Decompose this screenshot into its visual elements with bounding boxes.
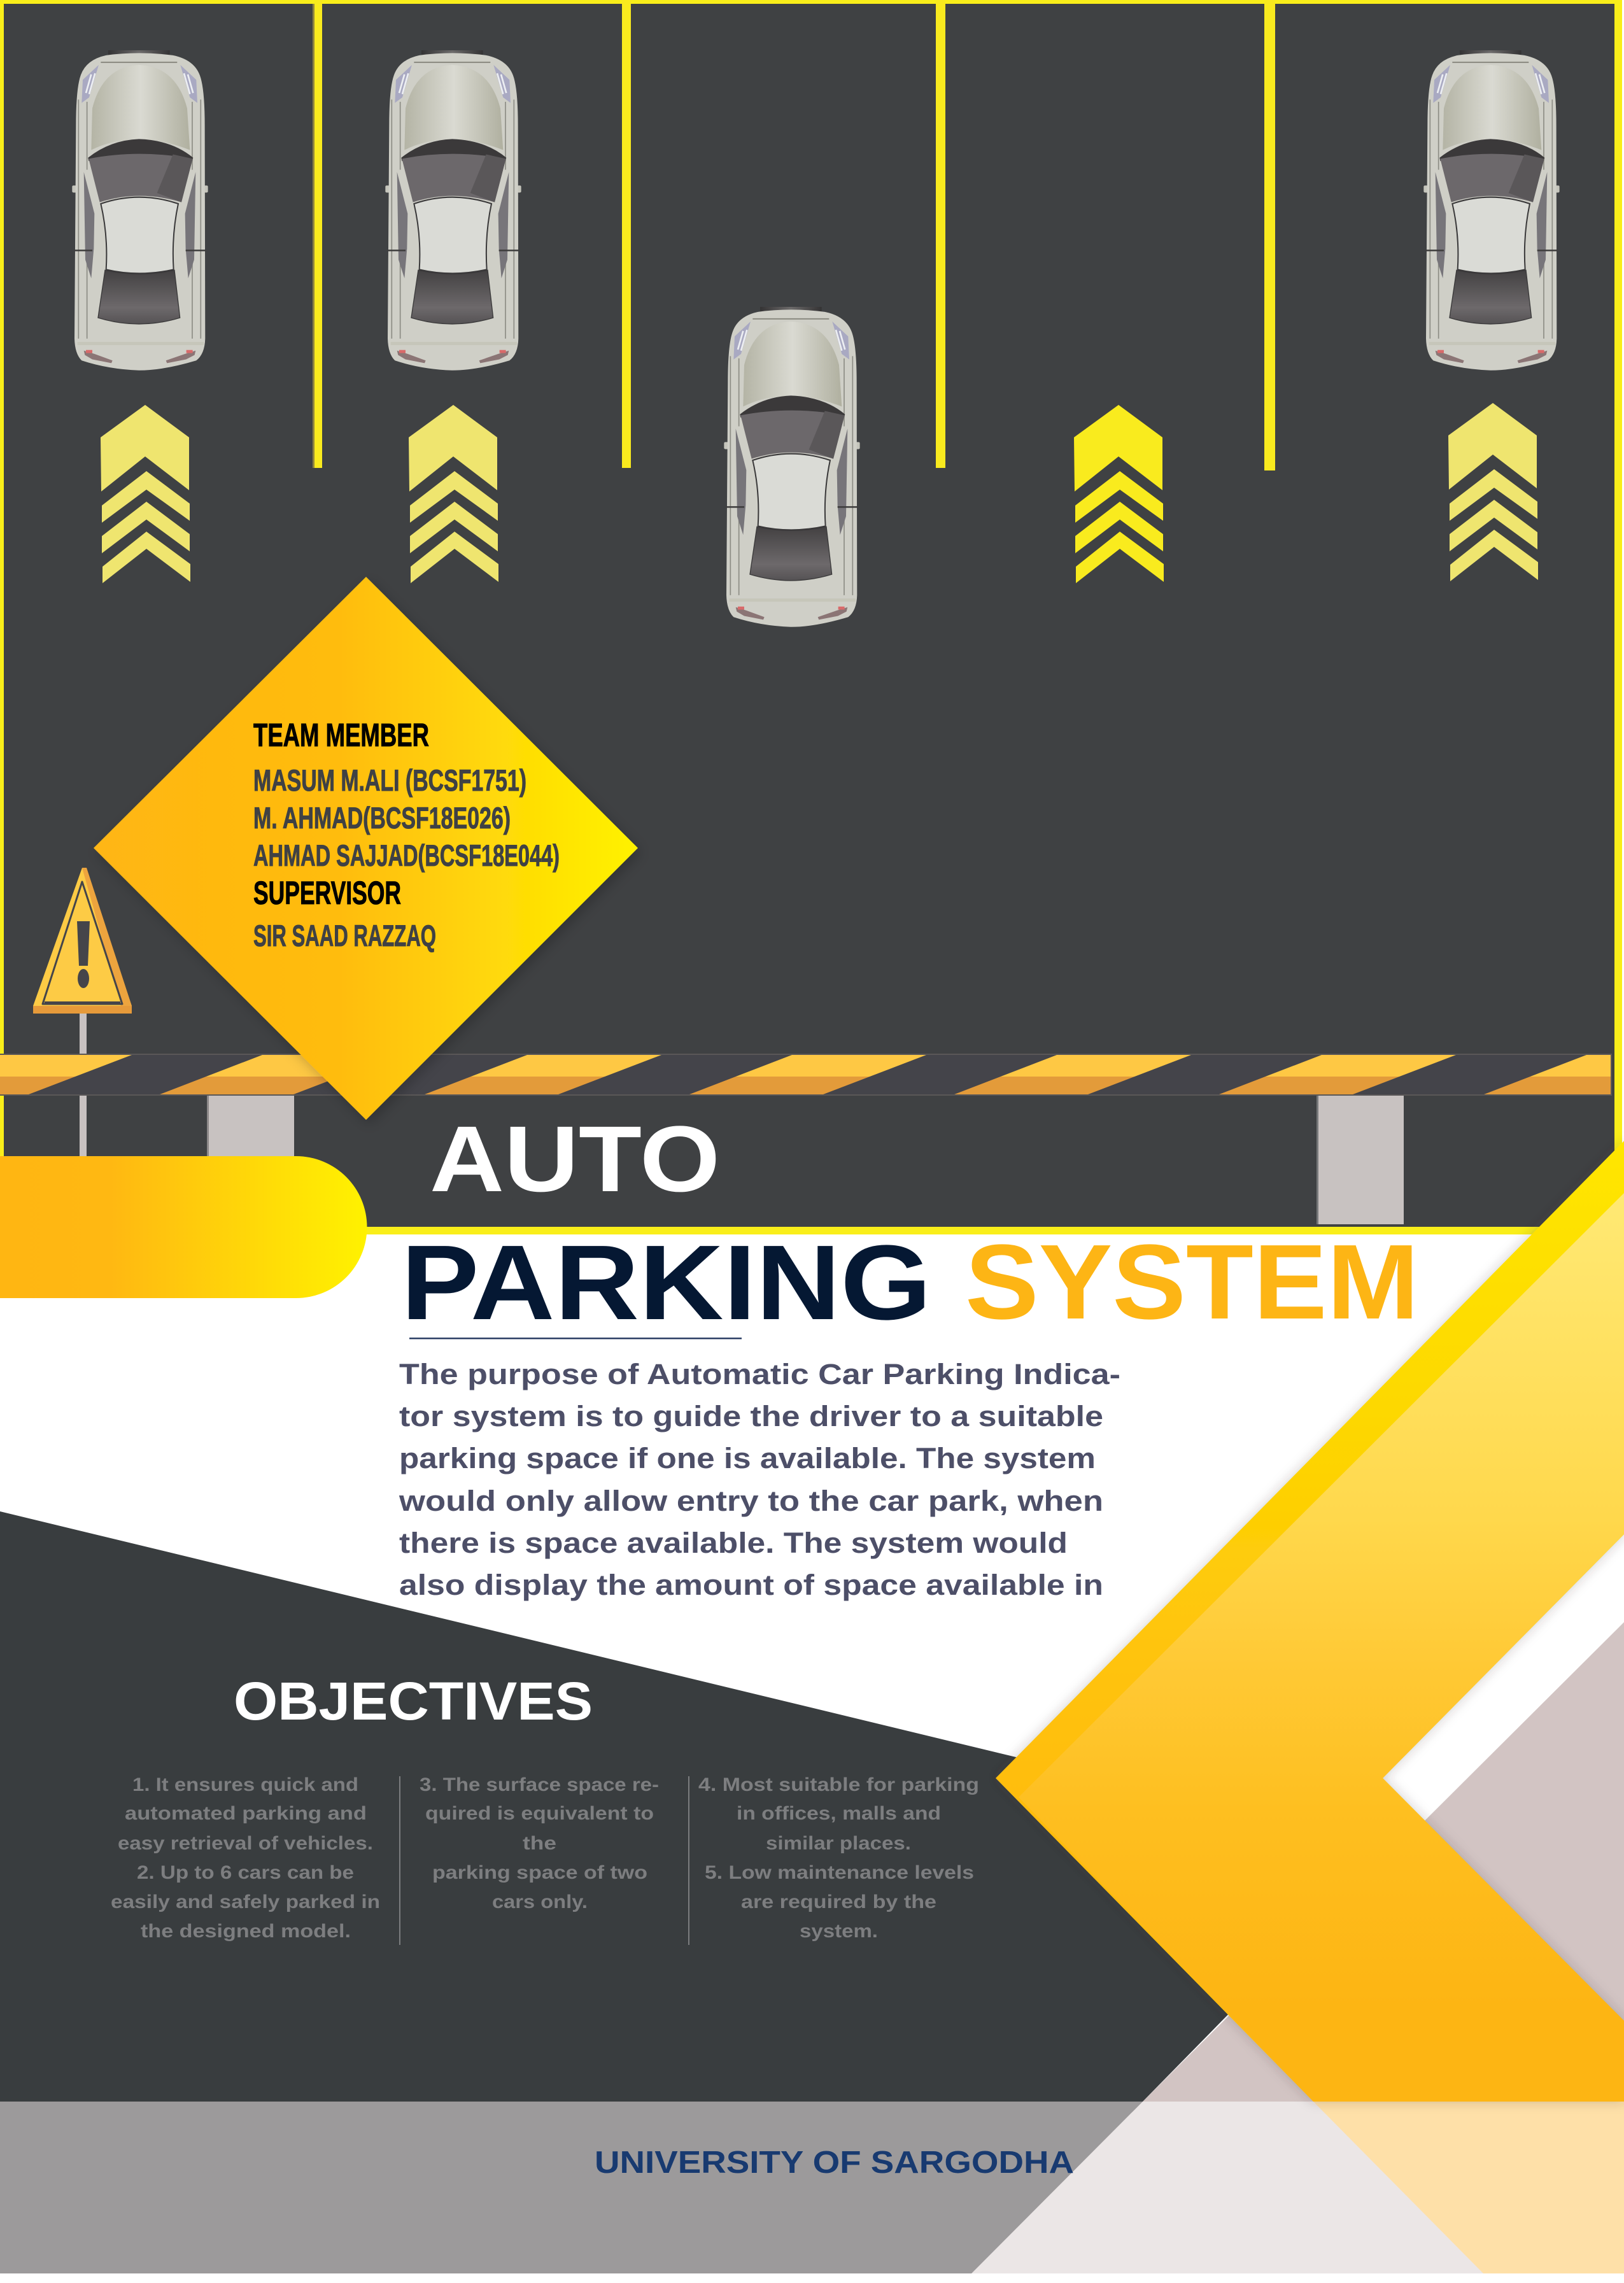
yellow chevron [996, 1141, 1624, 2102]
objectives column 3: 5. Low maintenance levels [705, 1862, 974, 1883]
arrow 1 [101, 405, 190, 583]
objectives column 3: 4. Most suitable for parking [698, 1774, 979, 1795]
outer chevron [996, 1141, 1624, 2102]
title line 2 [401, 1223, 1419, 1342]
team diamond panel [94, 577, 638, 1120]
objectives column 1: 1. It ensures quick and [132, 1774, 358, 1795]
barrier post left [207, 1094, 294, 1158]
objectives column 3: system. [800, 1921, 878, 1942]
car 2 [385, 50, 521, 371]
footer light triangle [971, 2102, 1624, 2273]
objectives column 1: 2. Up to 6 cars can be [137, 1862, 354, 1883]
objectives column 3: in offices, malls and [737, 1803, 941, 1824]
university name: UNIVERSITY OF SARGODHA [595, 2145, 1074, 2180]
barrier arm [0, 1054, 1624, 1096]
team member heading: TEAM MEMBER [253, 717, 429, 753]
title line 1: AUTO [430, 1107, 720, 1212]
yellow pill [0, 1156, 367, 1298]
objectives column 3: are required by the [741, 1891, 936, 1912]
intro paragraph [399, 1358, 1120, 1601]
title underline [409, 1338, 742, 1339]
objectives column 2: cars only. [492, 1891, 588, 1912]
objectives column 2: the [523, 1833, 556, 1854]
supervisor name: SIR SAAD RAZZAQ [253, 919, 436, 952]
column divider 2 [688, 1776, 689, 1945]
car 3 [724, 307, 860, 627]
objectives column 3: similar places. [766, 1833, 911, 1854]
team member 1: MASUM M.ALI (BCSF1751) [253, 763, 526, 797]
intro paragraph: would only allow entry to the car park, when [399, 1485, 1103, 1517]
objectives heading: OBJECTIVES [234, 1671, 593, 1731]
footer band [0, 2102, 1624, 2273]
parking lot surface [0, 0, 1622, 1234]
car 4 [1423, 50, 1560, 371]
team member 3: AHMAD SAJJAD(BCSF18E044) [253, 838, 560, 872]
taupe triangle [1143, 1622, 1624, 2102]
dark objectives panel [0, 1511, 1337, 2102]
inner chevron [1019, 1193, 1624, 2102]
parking bay lines [313, 0, 1275, 470]
objectives column 1: easy retrieval of vehicles. [118, 1833, 373, 1854]
objectives column 1: the designed model. [141, 1921, 351, 1942]
system word: SYSTEM [965, 1223, 1419, 1341]
intro paragraph: tor system is to guide the driver to a suitable [399, 1400, 1103, 1432]
objectives column 3 [698, 1774, 979, 1942]
intro paragraph: parking space if one is available. The system [399, 1442, 1096, 1474]
car 1 [72, 50, 208, 371]
intro paragraph: The purpose of Automatic Car Parking Indica- [399, 1358, 1120, 1390]
arrow 2 [409, 405, 498, 583]
intro paragraph: also display the amount of space available in [399, 1569, 1103, 1601]
objectives column 1: easily and safely parked in [111, 1891, 380, 1912]
objectives column 2: parking space of two [432, 1862, 647, 1883]
parking word: PARKING [401, 1224, 931, 1342]
intro paragraph: there is space available. The system would [399, 1527, 1068, 1559]
objectives column 2 [420, 1774, 659, 1912]
objectives column 1 [111, 1774, 380, 1942]
bottom margin [0, 2273, 1624, 2283]
arrow 4 [1448, 403, 1538, 581]
team member 2: M. AHMAD(BCSF18E026) [253, 801, 511, 835]
warning sign [33, 868, 132, 1157]
diamond shape [94, 577, 638, 1120]
supervisor heading: SUPERVISOR [253, 875, 401, 911]
column divider 1 [399, 1776, 400, 1945]
arrow 3 [1074, 405, 1164, 583]
objectives column 2: 3. The surface space re- [420, 1774, 659, 1795]
barrier post right [1317, 1094, 1404, 1224]
pale chevron tail [1313, 2102, 1624, 2273]
objectives column 2: quired is equivalent to [425, 1803, 654, 1824]
objectives column 1: automated parking and [125, 1803, 367, 1824]
